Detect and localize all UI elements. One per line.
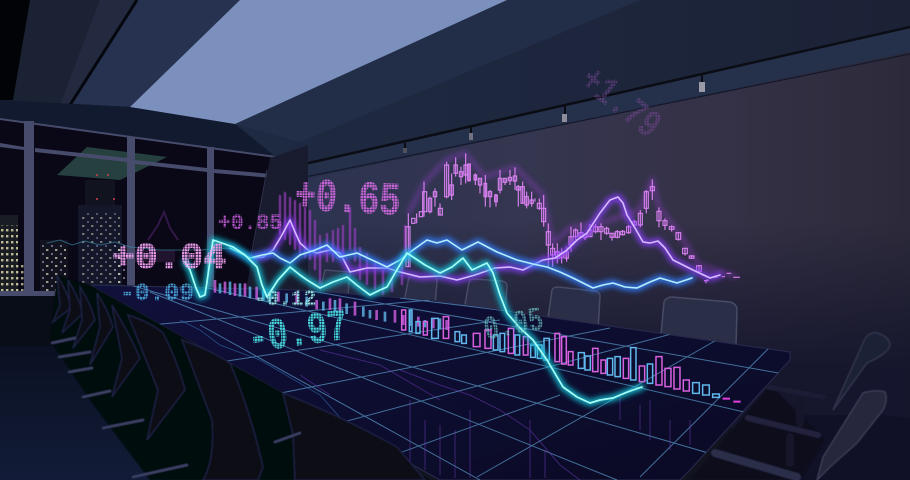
under-table shadow	[690, 385, 825, 480]
back row chairs	[320, 270, 737, 345]
city buildings	[0, 215, 18, 295]
value +0.04: +0.04	[112, 238, 226, 279]
value +1.79: +1.79	[570, 59, 669, 150]
candlestick chart	[280, 153, 740, 295]
right chairs	[690, 333, 890, 480]
chair arms	[52, 338, 300, 477]
line chart: blue	[47, 240, 692, 288]
left dim cluster	[280, 192, 405, 295]
soffit	[0, 100, 310, 157]
value +0.65: +0.65	[293, 171, 402, 229]
window frame	[0, 118, 277, 296]
chair back far	[833, 333, 890, 410]
tower	[85, 180, 115, 225]
line chart: violet	[253, 197, 720, 280]
ceiling right	[235, 0, 910, 165]
value -0.12: -0.12	[254, 287, 316, 312]
windows with night city	[0, 118, 277, 296]
value -0.09: -0.09	[120, 281, 194, 308]
left chairs row	[50, 275, 430, 480]
chair base shadow	[50, 275, 430, 480]
chair back near	[817, 391, 886, 480]
reflected ceiling shape	[57, 147, 167, 180]
ceiling left	[0, 0, 242, 107]
table top	[90, 285, 790, 480]
track lighting	[300, 27, 910, 178]
value -0.97: -0.97	[245, 302, 351, 366]
far bars	[215, 280, 447, 330]
right floor	[690, 415, 910, 480]
bar chart on table	[215, 280, 741, 402]
dot-matrix values	[113, 70, 660, 349]
chair arms	[715, 387, 823, 477]
wall	[300, 27, 910, 180]
value +0.85: +0.85	[218, 211, 282, 236]
near bars	[402, 310, 741, 402]
skylight panel	[130, 0, 507, 124]
table reflection of charts	[180, 320, 690, 480]
table grid	[130, 270, 790, 480]
main candles glow	[408, 153, 737, 277]
main candles	[406, 153, 740, 283]
line chart: cyan	[185, 240, 642, 403]
lower left wall and floor	[0, 296, 300, 480]
value 0.05: 0.05	[481, 302, 547, 351]
dark side column	[245, 145, 308, 300]
